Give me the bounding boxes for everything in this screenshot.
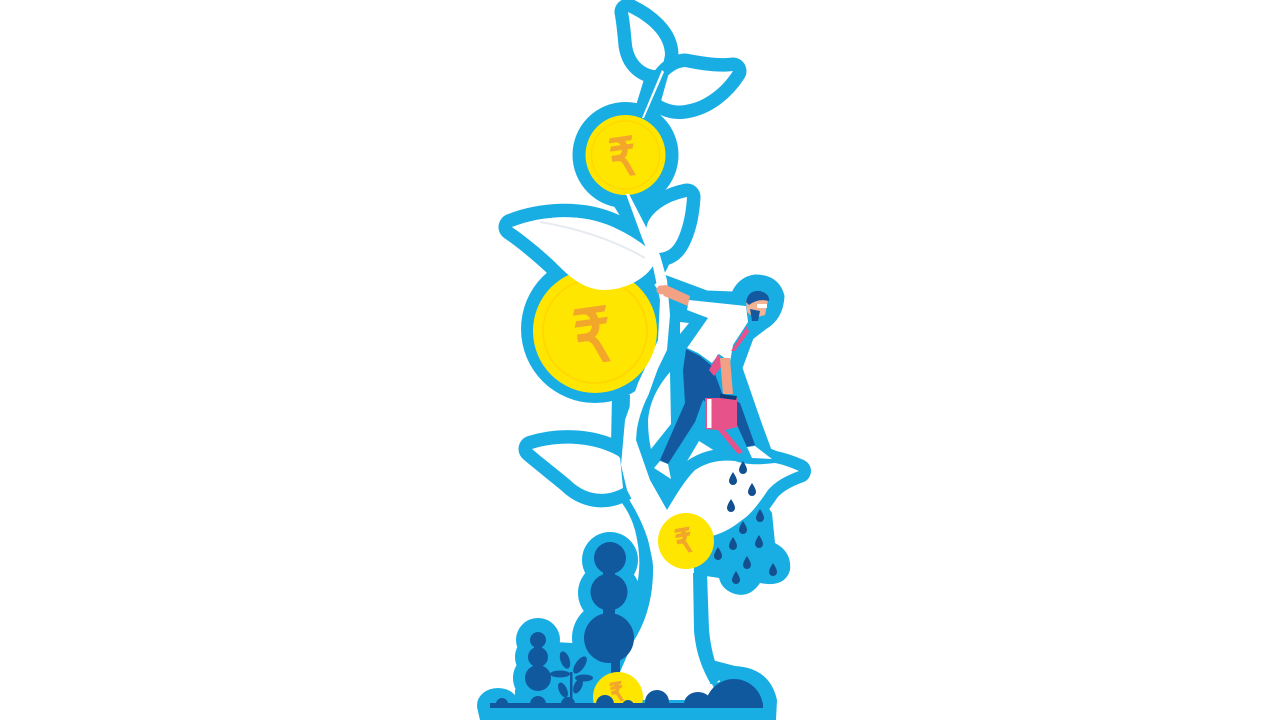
shirt [687,300,748,363]
ground halo bottom strip [479,708,776,720]
lower left leaf [532,444,623,494]
briefcase watering can [705,398,743,454]
white fill between humps [640,680,720,700]
icon: small tree [525,632,551,691]
icon: sprout plant [550,650,593,704]
rupee symbol: ₹ [568,292,618,383]
right foot [747,446,772,459]
man halo [636,276,800,510]
top coin halo [572,102,678,208]
icon: big rupee coin [533,269,657,393]
white stem [621,194,690,563]
white gap between legs [683,441,715,468]
panel: water drops [714,461,777,584]
ground halo [477,532,777,720]
trousers [660,349,755,464]
rupee symbol: ₹ [673,521,695,561]
can white strip [707,399,712,428]
icon: top rupee coin [586,115,666,195]
right trunk edge [693,573,722,686]
hair [746,291,769,305]
panel: ground and bushes [477,490,777,720]
glasses [757,304,767,308]
lower trunk left edge [612,490,653,645]
white gap at waist [680,322,689,334]
icon: top right leaf [656,67,733,106]
icon: top left leaf [628,12,665,70]
blue junction under top coin [612,192,668,250]
blue stem below big coin [611,395,630,470]
white trunk [620,500,714,700]
stem connector at top [634,76,668,112]
rupee symbol: ₹ [606,127,641,191]
panel: man [654,285,772,479]
beard [750,309,760,321]
lower right leaf with bush halo [667,461,799,595]
white gap inside vine loop [648,372,671,449]
drops [714,461,777,584]
icon: middle rupee coin [658,513,714,569]
icon: tall tree [584,542,634,674]
rupee symbol: ₹ [608,678,626,708]
big leaf white over coin [512,217,657,290]
small right leaf [646,197,687,253]
can handle [720,394,737,400]
big leaf outline [512,217,657,290]
face [746,300,768,318]
big coin halo [521,255,669,403]
ground dark strip and humps [490,679,763,720]
watering leaf outline [667,461,799,540]
arm [658,285,690,306]
tie [709,326,749,376]
icon: bottom rupee coin [593,672,643,720]
lower arm [720,358,733,394]
white stem top [642,70,664,118]
vein of big leaf [540,222,645,258]
left foot [654,461,671,479]
hand [656,286,666,294]
water bush halo [693,495,790,595]
panel: plant outline and leaves [512,12,800,595]
